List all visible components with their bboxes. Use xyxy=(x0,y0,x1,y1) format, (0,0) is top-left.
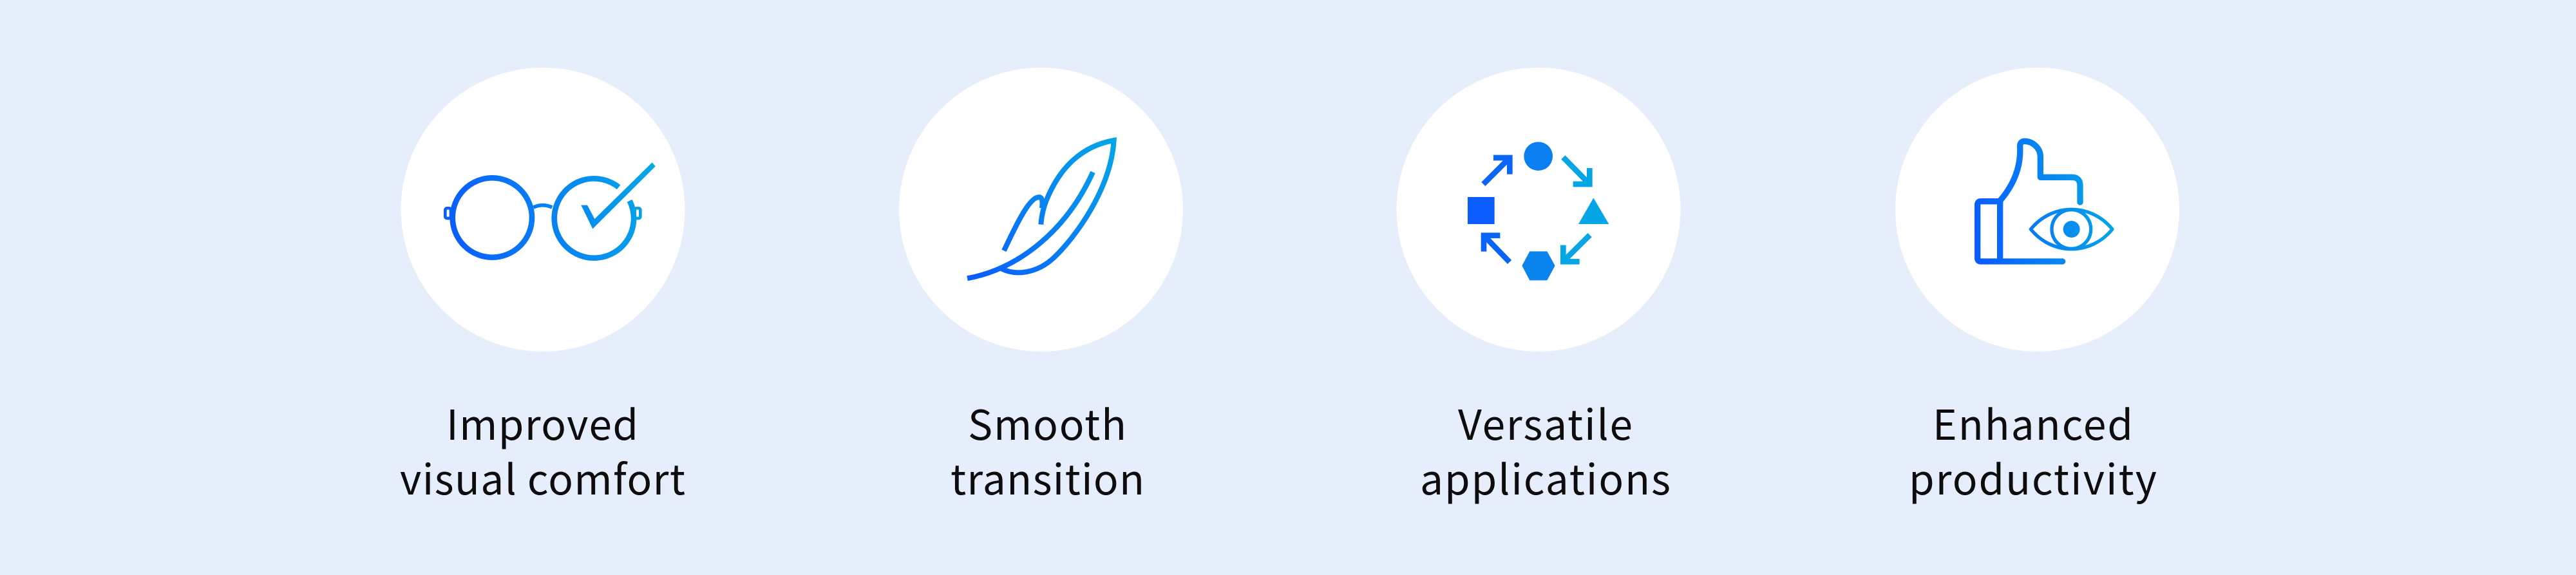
label: enhanced productivity xyxy=(1909,393,2157,507)
label: improved visual comfort: visual comfort xyxy=(400,448,685,507)
panel: smooth transition xyxy=(899,68,1183,507)
white circle xyxy=(1396,68,1681,352)
white circle xyxy=(1895,68,2179,352)
panel: improved visual comfort xyxy=(400,68,685,507)
white circle xyxy=(899,68,1183,352)
icon: glasses with check mark xyxy=(445,162,656,258)
panel: versatile applications xyxy=(1396,68,1681,507)
label: smooth transition: Smooth xyxy=(968,393,1126,452)
label: versatile applications: applications xyxy=(1420,448,1671,507)
white circle xyxy=(401,68,685,352)
label: improved visual comfort xyxy=(400,393,685,507)
label: improved visual comfort: Improved xyxy=(446,393,638,452)
icon: cycle of shapes xyxy=(1468,142,1609,280)
label: smooth transition: transition xyxy=(951,448,1144,507)
label: smooth transition xyxy=(951,393,1144,507)
label: enhanced productivity: Enhanced xyxy=(1933,393,2133,452)
panel: enhanced productivity xyxy=(1895,68,2179,507)
label: versatile applications xyxy=(1420,393,1671,507)
label: versatile applications: Versatile xyxy=(1458,393,1633,452)
icon: feather xyxy=(967,140,1114,278)
icon: thumbs up with eye xyxy=(1978,141,2112,261)
label: enhanced productivity: productivity xyxy=(1909,448,2157,507)
